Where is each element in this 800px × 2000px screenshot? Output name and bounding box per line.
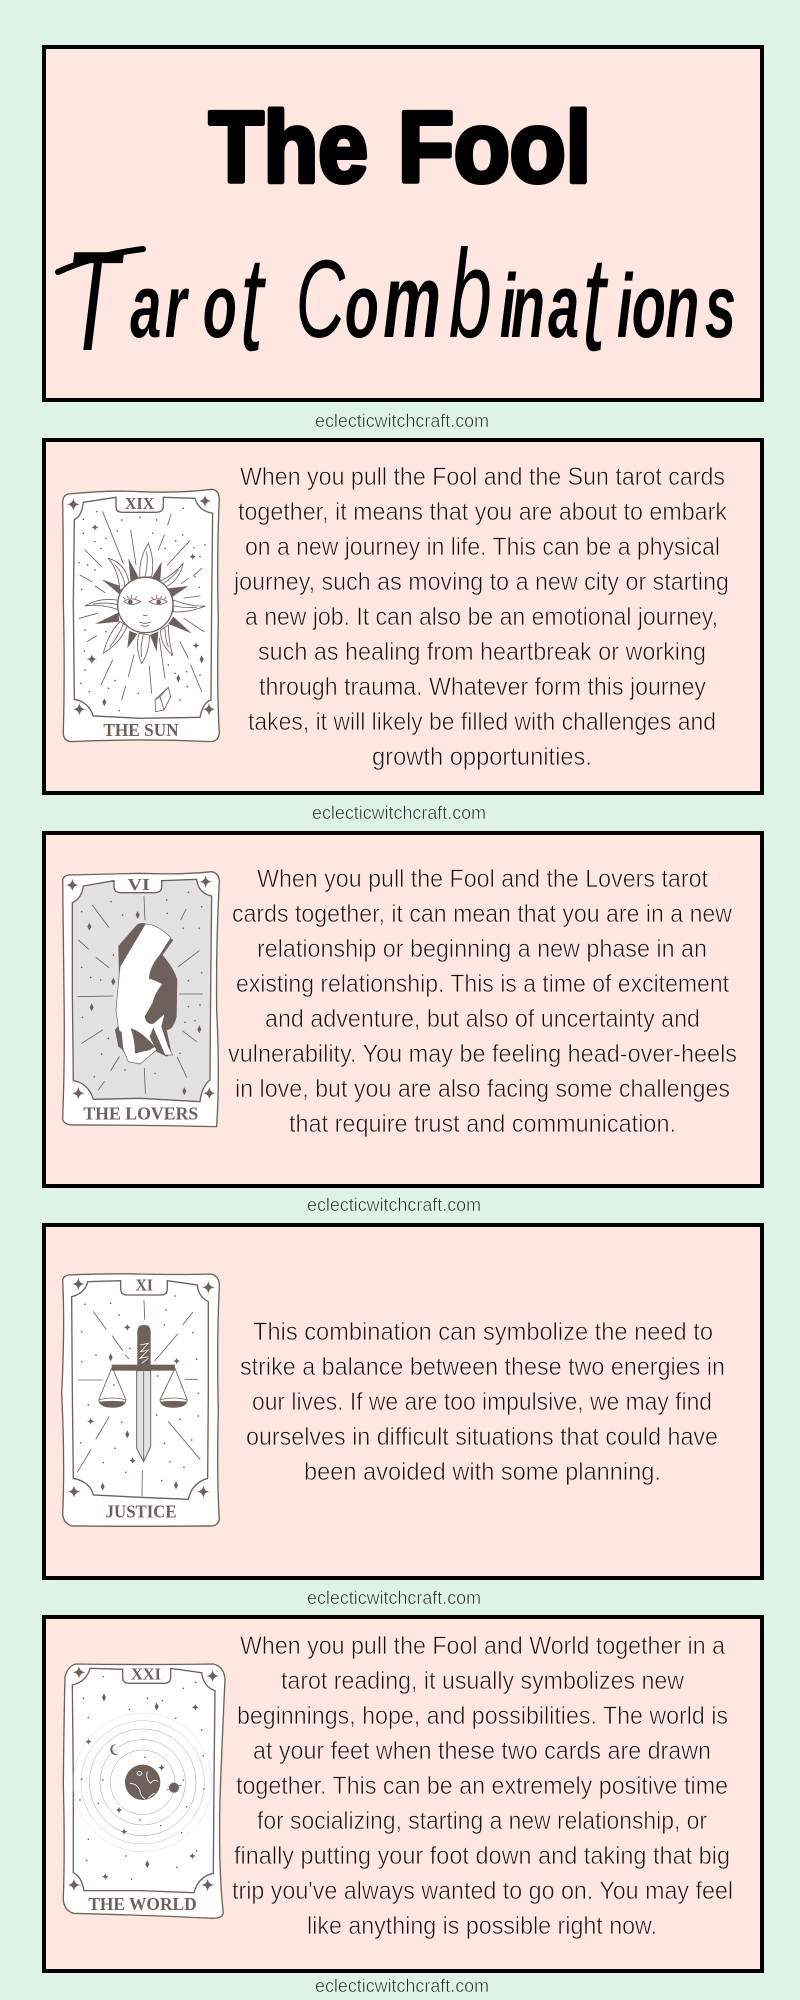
- text: The Sun meaning: through trauma. Whatever form this journey: [259, 673, 706, 701]
- card: The Sun: XIX: [125, 494, 155, 513]
- text: The World meaning: trip you've always wanted to go on. You may feel: [232, 1877, 733, 1905]
- subtitle: Tarot Combinations: t: [582, 227, 609, 379]
- text: The Sun meaning: growth opportunities.: [372, 743, 592, 771]
- icon: clasped hands: [115, 923, 177, 1064]
- panel: The Sun: [44, 440, 762, 793]
- subtitle: Tarot Combinations: C: [296, 238, 346, 361]
- text: The Sun meaning: journey, such as moving to a new city or starting: [233, 568, 729, 596]
- text: Justice meaning: our lives. If we are too impulsive, we may find: [252, 1388, 712, 1416]
- title: The Fool: [209, 92, 591, 204]
- subtitle: Tarot Combinations: a: [548, 255, 579, 356]
- title: The Fool: Fool: [398, 92, 591, 204]
- text: The World meaning: beginnings, hope, and possibilities. The world is: [237, 1702, 728, 1730]
- text: The Lovers meaning: and adventure, but also of uncertainty and: [265, 1005, 700, 1033]
- text: The Sun meaning: takes, it will likely be filled with challenges and: [248, 708, 716, 736]
- text: The World meaning: together. This can be an extremely positive time: [236, 1772, 728, 1800]
- icon: planet: [110, 1744, 181, 1800]
- text: The Sun meaning: a new job. It can also be an emotional journey,: [245, 603, 718, 631]
- panel: The World: [44, 1617, 762, 1971]
- footer: site name: eclecticwitchcraft.com: [315, 1976, 489, 1996]
- icon: sword and scales: [99, 1325, 187, 1462]
- chart: orbits: [73, 1713, 212, 1852]
- text: The Sun meaning: When you pull the Fool and the Sun tarot cards: [240, 463, 725, 491]
- card: Justice: [62, 1274, 219, 1526]
- card: The Sun: THE SUN: [103, 720, 179, 740]
- text: Justice meaning: ourselves in difficult situations that could have: [246, 1423, 718, 1451]
- subtitle: Tarot Combinations: s: [705, 255, 736, 356]
- footer: site name: eclecticwitchcraft.com: [315, 411, 489, 431]
- subtitle: Tarot Combinations: r: [165, 255, 190, 356]
- subtitle: Tarot Combinations: o: [345, 255, 379, 356]
- text: The World meaning: like anything is possible right now.: [307, 1912, 657, 1940]
- text: The World meaning: [232, 1632, 733, 1940]
- subtitle: Tarot Combinations: i: [500, 255, 517, 356]
- text: Justice meaning: been avoided with some planning.: [304, 1458, 661, 1486]
- text: The World meaning: at your feet when these two cards are drawn: [253, 1737, 711, 1765]
- text: The Lovers meaning: cards together, it can mean that you are in a new: [232, 900, 733, 928]
- text: The Lovers meaning: relationship or beginning a new phase in an: [257, 935, 707, 963]
- panel: title: [44, 47, 762, 400]
- panel: Justice: [44, 1225, 762, 1578]
- subtitle: Tarot Combinations: [58, 223, 736, 381]
- subtitle: Tarot Combinations: t: [240, 227, 267, 379]
- icon: crystal: [155, 687, 171, 712]
- text: The Lovers meaning: When you pull the Fool and the Lovers tarot: [257, 865, 708, 893]
- subtitle: Tarot Combinations: n: [511, 255, 545, 356]
- title: The Fool: The: [209, 92, 368, 204]
- card: Justice: XI: [136, 1276, 153, 1295]
- card: The World: XXI: [131, 1664, 161, 1683]
- text: The Sun meaning: together, it means that you are about to embark: [238, 498, 727, 526]
- text: The World meaning: for socializing, starting a new relationship, or: [257, 1807, 707, 1835]
- card: The Sun: [63, 489, 219, 742]
- subtitle: Tarot Combinations: o: [203, 255, 237, 356]
- card: The World: THE WORLD: [88, 1894, 197, 1914]
- text: The World meaning: When you pull the Fool and World together in a: [240, 1632, 725, 1660]
- subtitle: Tarot Combinations: i: [617, 255, 634, 356]
- text: The World meaning: tarot reading, it usually symbolizes new: [281, 1667, 685, 1695]
- card: The World: [63, 1664, 225, 1918]
- text: The Lovers meaning: that require trust and communication.: [289, 1110, 676, 1138]
- text: The World meaning: finally putting your foot down and taking that big: [234, 1842, 730, 1870]
- text: The Sun meaning: on a new journey in life. This can be a physical: [245, 533, 720, 561]
- subtitle: Tarot Combinations: n: [665, 255, 699, 356]
- text: The Sun meaning: [233, 463, 729, 771]
- text: The Lovers meaning: vulnerability. You may be feeling head-over-heels: [228, 1040, 737, 1068]
- text: The Lovers meaning: existing relationship. This is a time of excitement: [236, 970, 729, 998]
- card: The Lovers: THE LOVERS: [83, 1103, 198, 1123]
- card: The Lovers: [63, 872, 219, 1127]
- text: Justice meaning: This combination can symbolize the need to: [253, 1318, 713, 1346]
- subtitle: Tarot Combinations: b: [449, 225, 492, 365]
- text: Justice meaning: strike a balance between these two energies in: [240, 1353, 725, 1381]
- subtitle: Tarot Combinations: m: [383, 242, 441, 360]
- text: Justice meaning: [240, 1318, 725, 1486]
- subtitle: Tarot Combinations: T: [65, 223, 125, 381]
- text: The Sun meaning: such as healing from heartbreak or working: [258, 638, 706, 666]
- text: The Lovers meaning: in love, but you are also facing some challenges: [235, 1075, 730, 1103]
- footer: site name: eclecticwitchcraft.com: [307, 1588, 481, 1608]
- footer: site name: eclecticwitchcraft.com: [307, 1195, 481, 1215]
- footer: site name: eclecticwitchcraft.com: [312, 803, 486, 823]
- subtitle: Tarot Combinations: a: [130, 255, 161, 356]
- icon: sun: [85, 543, 206, 663]
- subtitle: Tarot Combinations: o: [632, 255, 666, 356]
- card: Justice: JUSTICE: [106, 1501, 177, 1521]
- card: The Lovers: VI: [128, 875, 150, 894]
- text: The Lovers meaning: [228, 865, 737, 1138]
- panel: The Lovers: [44, 833, 762, 1186]
